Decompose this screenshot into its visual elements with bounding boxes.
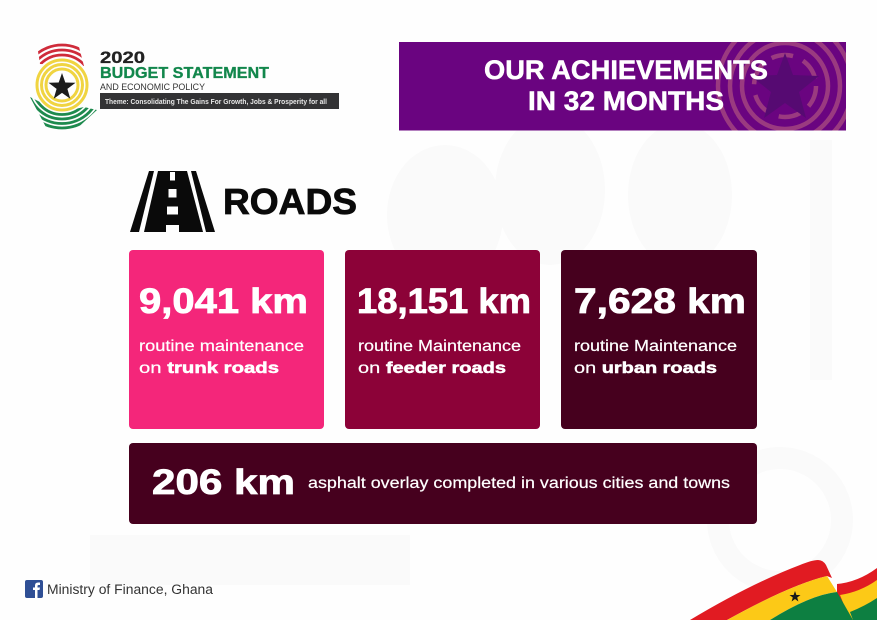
icon: road <box>130 171 215 232</box>
logo: Ghana map emblem <box>30 44 97 130</box>
card: asphalt overlay: 206 km <box>152 463 295 502</box>
budget statement heading <box>100 48 339 109</box>
banner: our achievements <box>399 42 846 130</box>
card: asphalt overlay <box>129 443 757 524</box>
budget statement heading: AND ECONOMIC POLICY <box>100 82 205 92</box>
card: feeder roads: 18,151 km <box>357 282 531 321</box>
banner emblem <box>716 42 846 130</box>
section heading: roads <box>130 171 357 232</box>
yellow rings <box>37 60 87 110</box>
card: urban roads <box>561 250 757 429</box>
card: urban roads: on urban roads <box>574 360 717 377</box>
card: feeder roads <box>345 250 540 429</box>
theme bar <box>100 93 339 109</box>
green map stripes <box>30 97 97 130</box>
red map stripes <box>38 44 84 66</box>
theme bar: Theme: Consolidating The Gains For Growth, Jobs & Prosperity for all <box>105 97 327 106</box>
card: urban roads: 7,628 km <box>574 282 746 321</box>
background: faint banknote watermark <box>90 115 842 585</box>
near ribbon section <box>690 560 832 620</box>
black star <box>48 73 76 99</box>
icon: facebook <box>25 580 43 598</box>
card: trunk roads: on trunk roads <box>139 360 279 377</box>
banner: our achievements: IN 32 MONTHS <box>528 86 724 116</box>
card: trunk roads: routine maintenance <box>139 338 304 355</box>
budget statement heading: BUDGET STATEMENT <box>100 65 270 82</box>
card: urban roads: routine Maintenance <box>574 338 737 355</box>
far ribbon section <box>837 568 877 620</box>
card: trunk roads: 9,041 km <box>139 282 308 321</box>
budget statement heading: 2020 <box>100 48 145 67</box>
card: feeder roads: routine Maintenance <box>358 338 521 355</box>
flag star <box>790 591 800 602</box>
card: asphalt overlay: asphalt overlay completed in various cities and towns <box>308 475 730 492</box>
Ghana flag ribbon <box>690 560 877 620</box>
footer: facebook credit: Ministry of Finance, Ghana <box>47 582 213 597</box>
card: feeder roads: on feeder roads <box>358 360 506 377</box>
card: trunk roads <box>129 250 324 429</box>
banner: our achievements: OUR ACHIEVEMENTS <box>484 55 768 85</box>
section heading: roads: ROADS <box>223 181 357 222</box>
